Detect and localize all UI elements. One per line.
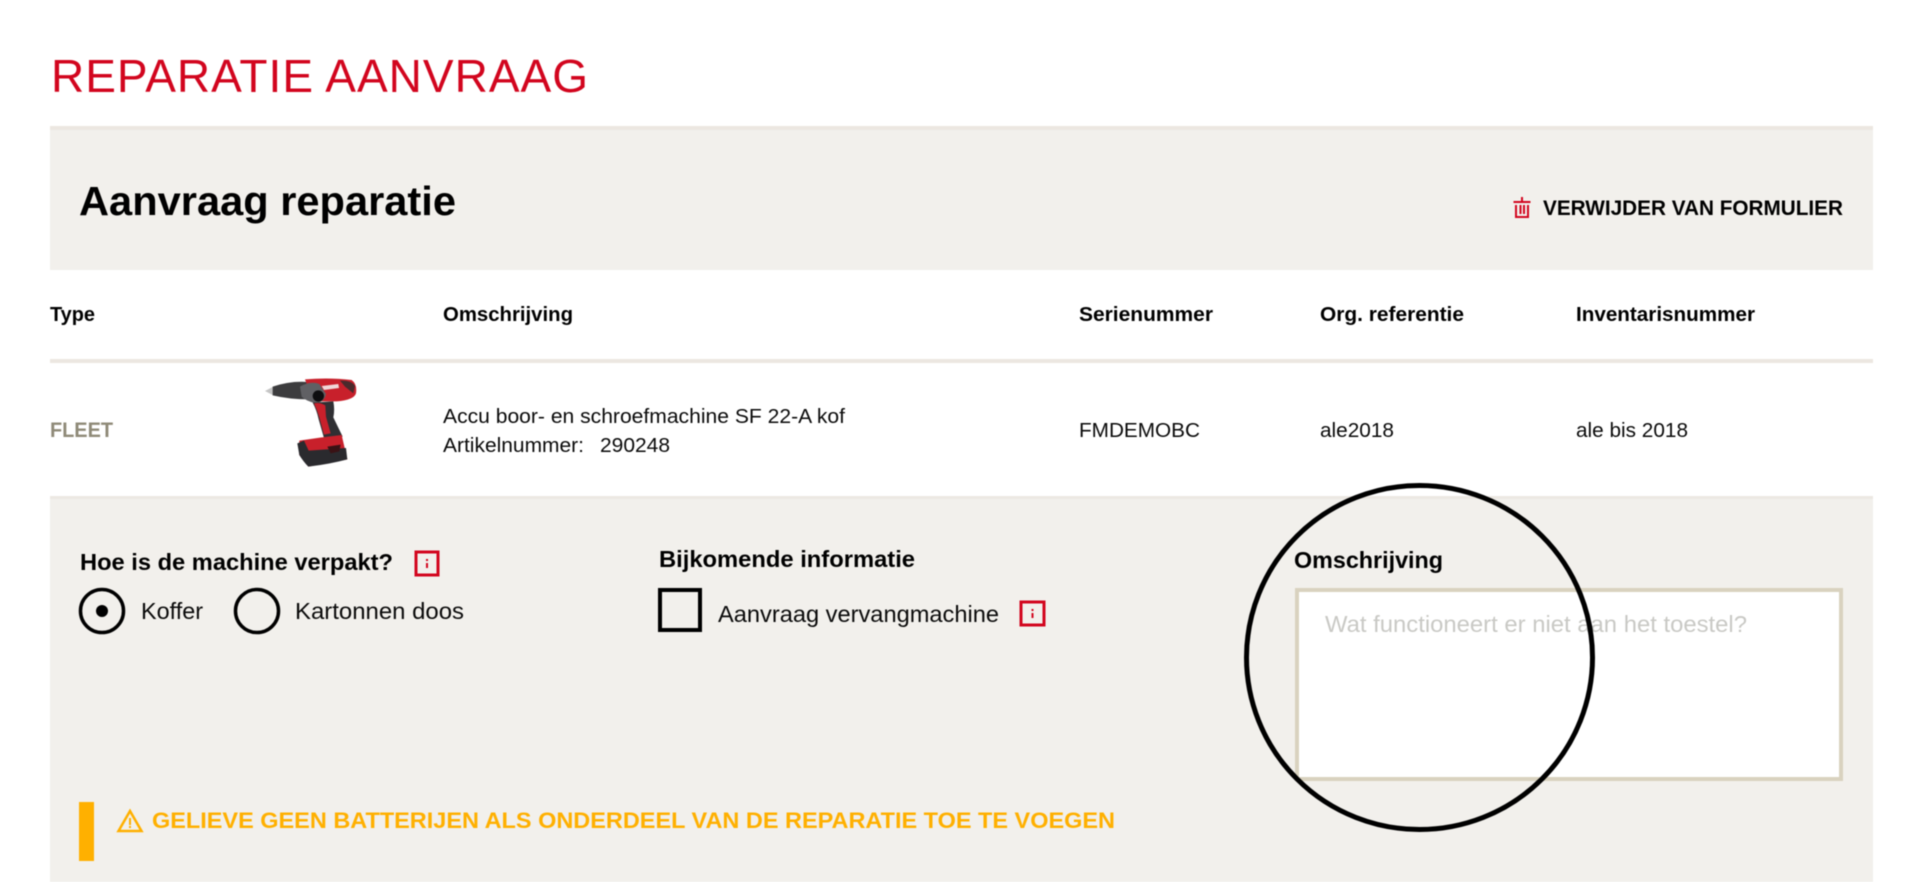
article number: Artikelnummer: — [443, 434, 584, 457]
radio: kartonnen doos — [236, 590, 464, 632]
table data row — [50, 378, 1688, 467]
field: additional information: Bijkomende informatie — [659, 546, 915, 572]
table header row: Omschrijving — [443, 303, 573, 326]
description: Accu boor- en schroefmachine SF 22-A kof — [443, 405, 845, 428]
radio: kartonnen doos: Kartonnen doos — [295, 598, 464, 624]
panel: repair form — [50, 496, 1873, 882]
table header row — [50, 303, 1755, 326]
table data row: ale bis 2018 — [1576, 419, 1688, 442]
article number: 290248 — [600, 434, 670, 457]
placeholder: Wat functioneert er niet aan het toestel? — [1325, 611, 1747, 637]
field: packaging — [80, 549, 464, 632]
panel: header — [50, 126, 1873, 270]
table header row: Org. referentie — [1320, 303, 1464, 326]
table header row: Type — [50, 303, 95, 326]
field: description: Omschrijving — [1294, 547, 1443, 573]
table header row: Inventarisnummer — [1576, 303, 1755, 326]
field: additional information — [659, 546, 1044, 630]
checkbox — [660, 590, 700, 630]
table header row: Serienummer — [1079, 303, 1213, 326]
warning — [79, 802, 1115, 861]
icon: warning triangle — [118, 811, 142, 831]
icon: info — [1021, 602, 1044, 625]
label: fleet: FLEET — [50, 419, 113, 442]
icon: cordless drill — [265, 378, 356, 467]
checkbox label: Aanvraag vervangmachine — [718, 601, 999, 627]
callout: highlight circle — [1246, 486, 1592, 830]
warning: GELIEVE GEEN BATTERIJEN ALS ONDERDEEL VAN DE REPARATIE TOE TE VOEGEN — [152, 808, 1115, 833]
radio: koffer: Koffer — [141, 598, 203, 624]
radio: koffer — [80, 590, 203, 632]
table data row: ale2018 — [1320, 419, 1394, 442]
field: description — [1294, 547, 1841, 779]
icon: trash — [1514, 197, 1530, 217]
article number — [443, 434, 670, 457]
heading: aanvraag reparatie: Aanvraag reparatie — [79, 178, 456, 224]
field: packaging: Hoe is de machine verpakt? — [80, 549, 393, 575]
textarea — [1297, 590, 1841, 779]
title: REPARATIE AANVRAAG — [51, 50, 588, 102]
icon: info — [416, 552, 438, 575]
action: remove from form: VERWIJDER VAN FORMULIER — [1543, 196, 1843, 220]
table data row: FMDEMOBC — [1079, 419, 1200, 442]
